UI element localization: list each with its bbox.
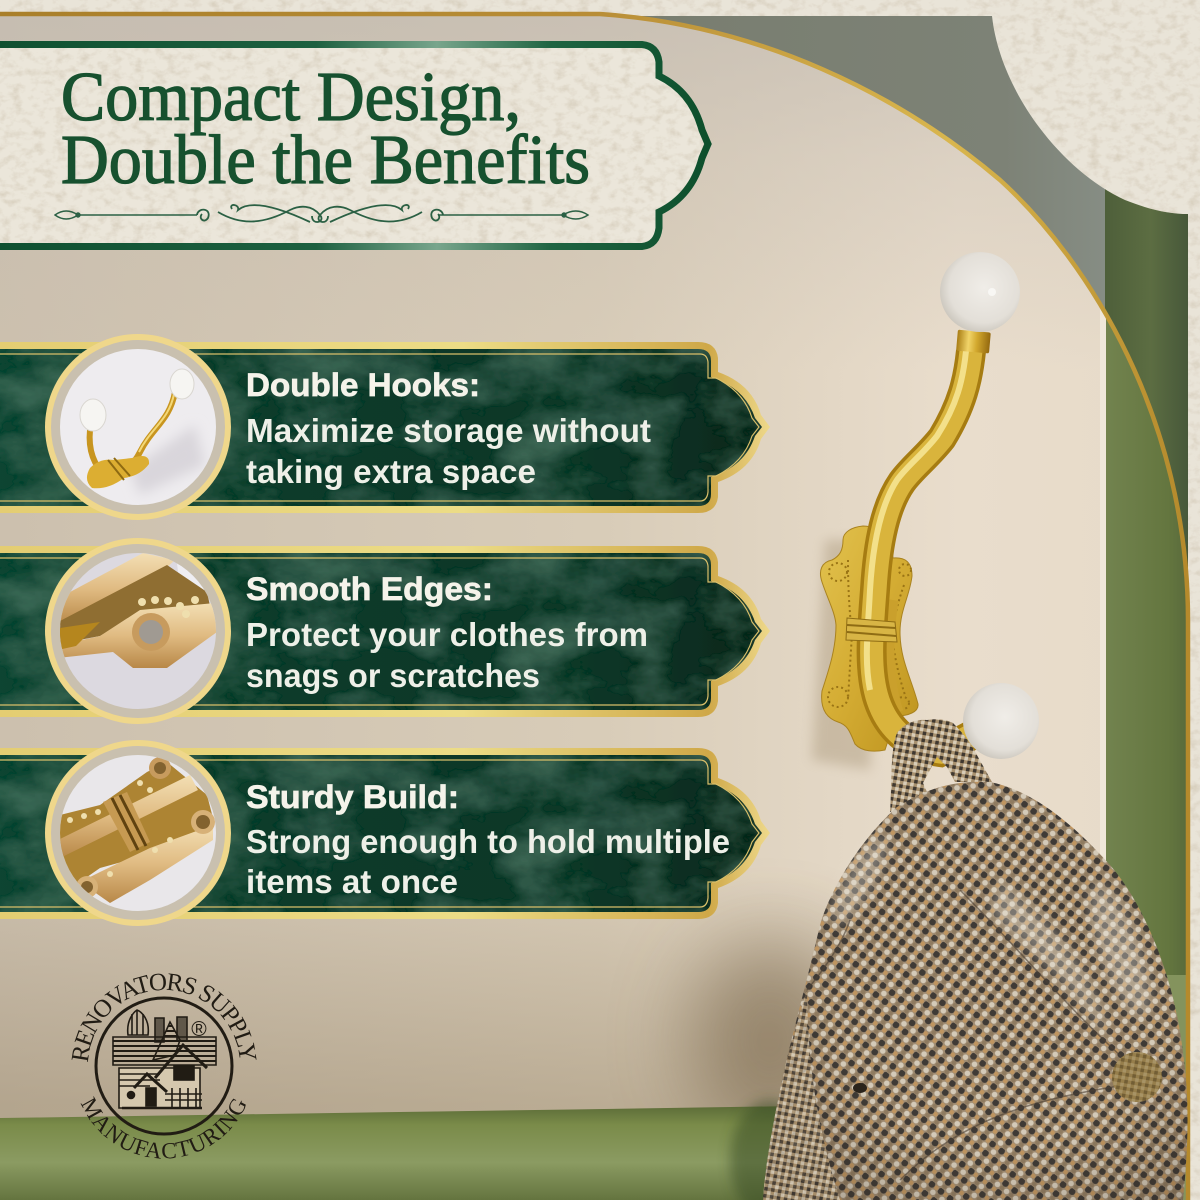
round image: brass bracket closeup xyxy=(45,740,231,926)
logo ring xyxy=(96,998,232,1134)
card 2: smooth edges xyxy=(0,538,770,724)
cap button xyxy=(1112,1052,1162,1102)
card 3 body xyxy=(246,823,730,900)
lower porcelain knob xyxy=(963,683,1039,759)
card shape xyxy=(0,342,770,513)
title line 2: Double the Benefits xyxy=(61,122,590,199)
upper collar xyxy=(956,330,991,353)
card 1: double hooks xyxy=(0,334,770,520)
card 2 body xyxy=(246,616,648,694)
cap highlights xyxy=(823,830,1163,1040)
banner border xyxy=(0,44,708,246)
tweed flat cap xyxy=(763,719,1188,1200)
cap shading xyxy=(763,782,1188,1200)
wall vertical shading xyxy=(0,16,1046,1118)
banner paper fill xyxy=(0,44,708,246)
brand logo xyxy=(72,973,256,1159)
large brass double hook xyxy=(812,252,1039,770)
cap shadow on wall xyxy=(690,940,850,1140)
main arm body xyxy=(872,351,985,752)
green lower right shelf xyxy=(1166,975,1186,1200)
main arm dark edge xyxy=(872,351,985,752)
cap brim xyxy=(763,990,840,1200)
card 3: sturdy build xyxy=(0,740,770,926)
card 3 body: Strong enough to hold multiple xyxy=(246,823,730,860)
card shape xyxy=(0,748,770,919)
cap eyelet xyxy=(853,1083,867,1093)
card 1 body: taking extra space xyxy=(246,453,536,490)
main arm highlight xyxy=(867,351,966,690)
upper porcelain knob xyxy=(940,252,1020,332)
green side panel xyxy=(1106,319,1186,975)
card 3 body: items at once xyxy=(246,863,458,900)
plate beading xyxy=(828,560,911,709)
white panel edge xyxy=(1100,309,1106,860)
card shape xyxy=(0,546,770,717)
moulding shadow near cap xyxy=(725,1094,778,1200)
title line 1: Compact Design, xyxy=(61,59,521,136)
hook second inner arm xyxy=(889,600,898,712)
house icon xyxy=(113,1010,216,1108)
logo text top: RENOVATORS SUPPLY xyxy=(72,973,256,1062)
ornate mounting plate xyxy=(820,526,918,751)
card 3 heading: Sturdy Build: xyxy=(246,779,459,815)
registered mark: ® xyxy=(191,1018,207,1041)
card 1 body xyxy=(246,412,651,490)
cap body xyxy=(763,782,1188,1200)
card 2 body: Protect your clothes from xyxy=(246,616,648,653)
green baseboard moulding xyxy=(0,1106,800,1200)
card 1 heading: Double Hooks: xyxy=(246,367,480,403)
binding band xyxy=(846,618,897,642)
card 1 body: Maximize storage without xyxy=(246,412,651,449)
backing wall panel: grey-green and dark green xyxy=(600,0,1200,600)
card 2 heading: Smooth Edges: xyxy=(246,571,493,607)
round image: small hook xyxy=(45,334,231,520)
title banner xyxy=(0,44,708,246)
logo text bottom: MANUFACTURING xyxy=(80,1096,246,1159)
hook soft shadow xyxy=(812,540,880,770)
flourish ornament xyxy=(55,205,588,222)
cap seams xyxy=(807,890,1125,1180)
cap strap loop xyxy=(890,719,992,812)
card 2 body: snags or scratches xyxy=(246,657,540,694)
round image: brass edge closeup xyxy=(45,538,231,724)
